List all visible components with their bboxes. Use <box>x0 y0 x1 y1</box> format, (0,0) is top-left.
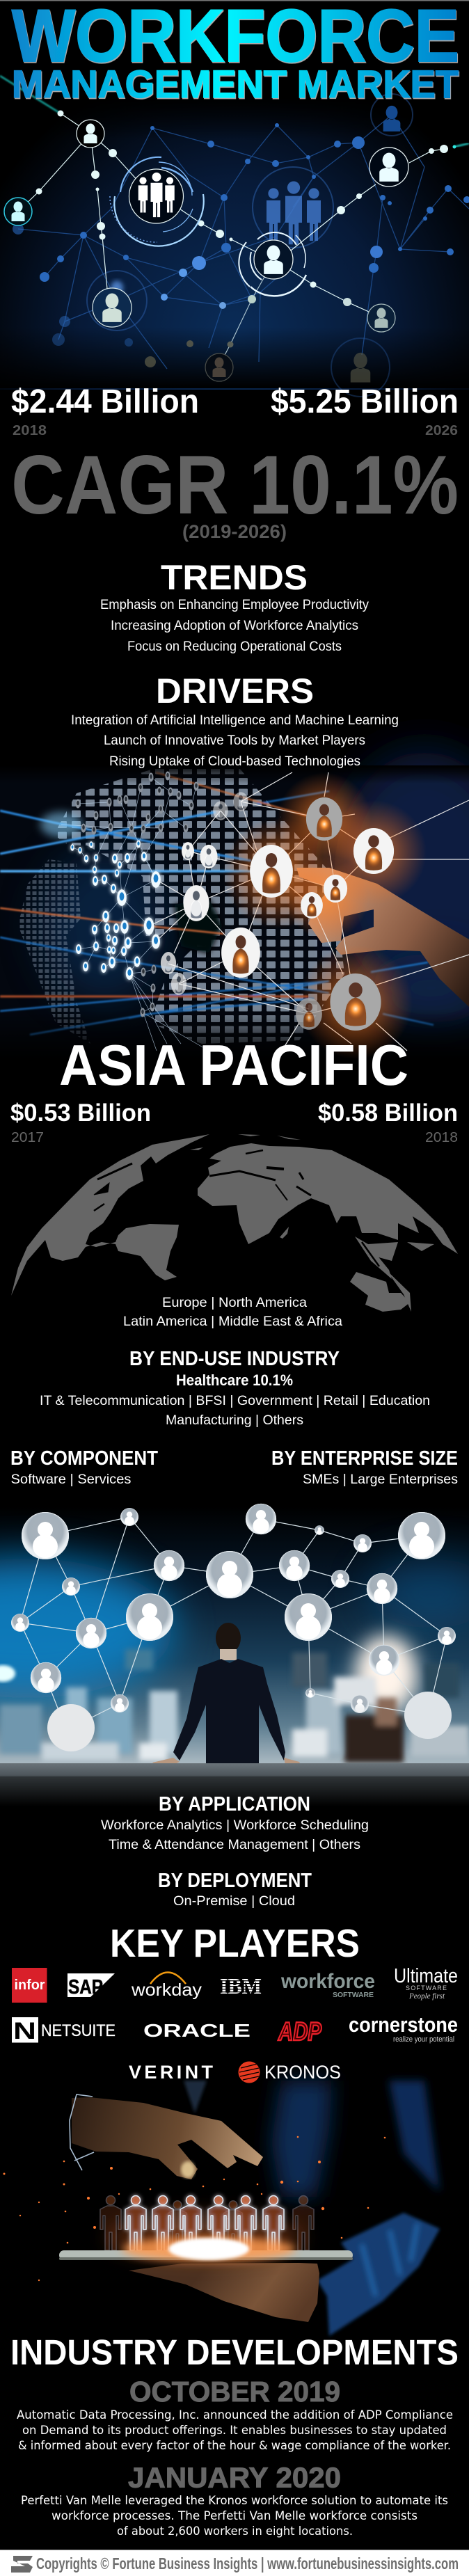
development: october 2019 <box>17 2376 453 2452</box>
sparks <box>3 2136 385 2281</box>
concrete ledge <box>0 1763 469 1806</box>
tablet <box>59 2250 353 2260</box>
section: by deployment <box>158 1870 312 1909</box>
section: by application: Workforce Analytics | Workforce Scheduling <box>101 1818 369 1833</box>
development: january 2020: workforce processes. The Perfetti Van Melle workforce consists <box>51 2509 418 2522</box>
section: by end-use industry <box>40 1348 430 1428</box>
stat: 2018 regional value: $0.58 Billion <box>318 1099 458 1127</box>
section: by component <box>10 1447 158 1487</box>
stat: 2017 regional value <box>10 1099 151 1145</box>
development: january 2020: Perfetti Van Melle leveraged the Kronos workforce solution to automate its <box>21 2494 448 2507</box>
heading: asia pacific: ASIA PACIFIC <box>59 1033 408 1097</box>
logo: ADP: ADP <box>278 2017 321 2046</box>
development: october 2019: Automatic Data Processing, Inc. announced the addition of ADP Compliance <box>17 2408 453 2422</box>
section: trends: Emphasis on Enhancing Employee Productivity <box>100 597 369 612</box>
section: by enterprise size: SMEs | Large Enterprises <box>303 1472 458 1487</box>
orange glow halos <box>223 772 427 1059</box>
main links <box>149 772 469 1051</box>
text: other regions: Europe | North America <box>162 1295 307 1310</box>
network person nodes <box>11 1504 456 1751</box>
footer: copyright bar <box>0 2550 469 2576</box>
image: hand touching global network <box>0 752 469 1059</box>
section: trends: TRENDS <box>161 558 308 597</box>
node: person F <box>93 288 132 327</box>
section: by application: Time & Attendance Management | Others <box>109 1837 360 1852</box>
logo: workday <box>131 1972 202 2000</box>
title: workforce management market: MANAGEMENT MARKET <box>12 62 459 106</box>
person nodes <box>161 792 394 1031</box>
section: by end-use industry: BY END-USE INDUSTRY <box>129 1348 340 1370</box>
stat: 2018 regional value <box>318 1099 458 1145</box>
upper hand <box>72 2097 263 2179</box>
logo: netsuite: N <box>13 2018 36 2044</box>
section: by enterprise size <box>271 1447 458 1487</box>
text: other regions <box>123 1295 342 1329</box>
shirt cuff line <box>70 2094 94 2170</box>
text: other regions: Latin America | Middle East & Africa <box>123 1314 342 1329</box>
development: january 2020: JANUARY 2020 <box>128 2462 341 2494</box>
faint grey network nodes <box>75 771 199 1017</box>
light streaks <box>0 772 434 1035</box>
development: january 2020: of about 2,600 workers in eight locations. <box>117 2525 353 2538</box>
icon: fortune business insights <box>11 2556 33 2573</box>
image: businessman facing connected network <box>0 1504 469 1806</box>
stat: 2018 regional value: 2018 <box>425 1129 458 1145</box>
node: person H <box>205 353 233 381</box>
stat: 2026 market size: $5.25 Billion <box>271 383 459 420</box>
stat: 2018 market size <box>11 383 199 438</box>
section: drivers: Rising Uptake of Cloud-based Technologies <box>109 754 360 769</box>
node: person E with rings <box>239 232 306 296</box>
logo: kronos: KRONOS <box>264 2062 341 2083</box>
logo: infor: infor <box>14 1978 45 1993</box>
businessman from behind <box>152 1623 301 1765</box>
section: trends <box>100 558 369 654</box>
node: person G <box>367 304 395 332</box>
section: trends: Increasing Adoption of Workforce Analytics <box>111 618 358 633</box>
section: by end-use industry: IT & Telecommunication | BFSI | Government | Retail | Education <box>40 1393 430 1408</box>
logo: workforce software: SOFTWARE <box>333 1991 374 1999</box>
logo: workday: workday <box>131 1980 202 2000</box>
node: person D <box>369 148 408 186</box>
development: january 2020 <box>21 2462 448 2538</box>
logo: cornerstone: realize your potential <box>393 2035 454 2044</box>
development: october 2019: on Demand to its product offerings. It enables businesses to stay updated <box>22 2424 447 2437</box>
heading: key players: KEY PLAYERS <box>110 1921 360 1966</box>
section: drivers: Integration of Artificial Intelligence and Machine Learning <box>71 713 399 728</box>
logo: oracle: ORACLE <box>143 2020 251 2041</box>
section: trends: Focus on Reducing Operational Costs <box>127 639 342 654</box>
hand <box>296 868 469 1007</box>
logo: ultimate software: People first <box>408 1992 445 2001</box>
stat: 2017 regional value: $0.53 Billion <box>10 1099 151 1127</box>
logo: SAP: SAP <box>68 1976 103 1998</box>
image: hand over tablet with glowing people <box>0 2081 469 2336</box>
development: october 2019: OCTOBER 2019 <box>129 2376 340 2408</box>
logo: infor <box>12 1968 47 2003</box>
section: drivers: DRIVERS <box>156 671 314 710</box>
node: team group <box>110 157 204 246</box>
logo: netsuite <box>12 2017 116 2044</box>
logo: ultimate software: SOFTWARE <box>406 1985 447 1991</box>
logo: workforce software: workforce <box>280 1970 375 1993</box>
stat: 2018 market size: $2.44 Billion <box>11 383 199 420</box>
connection lines <box>18 113 444 356</box>
logo: ultimate software: Ultimate <box>394 1965 458 1987</box>
bright blue network nodes <box>70 840 161 980</box>
logo: verint: VERINT <box>129 2062 213 2083</box>
image: people network <box>0 76 469 397</box>
section: by component: Software | Services <box>11 1472 132 1487</box>
logo: IBM: IBM <box>220 1973 262 1998</box>
section: drivers: Launch of Innovative Tools by Market Players <box>104 733 365 748</box>
glowing people figures <box>108 2215 303 2259</box>
logo: netsuite: NETSUITE <box>41 2021 116 2040</box>
development: october 2019: & informed about every factor of the hour & wage compliance of the worker. <box>18 2439 451 2452</box>
section: by deployment: BY DEPLOYMENT <box>158 1870 312 1892</box>
network links <box>20 1517 447 1728</box>
section: by end-use industry: Healthcare 10.1% <box>176 1372 293 1389</box>
logo: kronos <box>238 2061 341 2083</box>
stat: 2026 market size <box>271 383 459 438</box>
section: by deployment: On-Premise | Cloud <box>173 1893 295 1909</box>
section: by application <box>101 1793 369 1852</box>
lower hand <box>129 2263 319 2322</box>
logo: ultimate software <box>394 1965 458 2001</box>
section: drivers <box>71 671 399 769</box>
stat: CAGR: (2019-2026) <box>182 521 287 542</box>
suit <box>184 2081 440 2336</box>
icon: world globe map <box>11 1134 458 1312</box>
small blue network <box>61 777 209 1051</box>
stat: 2018 market size: 2018 <box>13 423 47 438</box>
section: by component: BY COMPONENT <box>10 1447 158 1470</box>
node: person A <box>77 120 104 148</box>
section: by end-use industry: Manufacturing | Others <box>166 1413 303 1428</box>
blurred city <box>0 1649 469 1763</box>
node: person B <box>4 198 32 225</box>
stat: 2026 market size: 2026 <box>425 423 458 438</box>
stat: 2017 regional value: 2017 <box>11 1129 44 1145</box>
section: by application: BY APPLICATION <box>159 1793 310 1815</box>
